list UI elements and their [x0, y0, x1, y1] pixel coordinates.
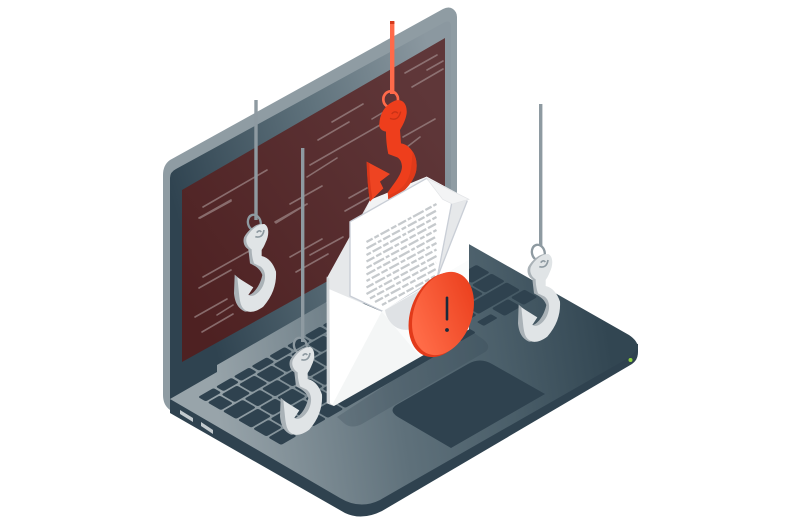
envelope inner grey flap — [437, 201, 467, 277]
letter paper — [350, 178, 469, 312]
pocket left panel — [327, 288, 382, 405]
keyboard — [198, 249, 537, 445]
red hook shading — [388, 152, 417, 199]
envelope with paper — [327, 178, 469, 406]
keyboard number row — [208, 306, 389, 410]
envelope back flap — [327, 177, 469, 303]
alert badge — [397, 263, 485, 366]
base top deck — [170, 222, 638, 505]
keyboard row three — [223, 265, 490, 419]
laptop base — [170, 222, 638, 517]
badge face — [401, 263, 485, 364]
red fishing line — [390, 22, 394, 94]
hook body — [280, 336, 322, 435]
envelope back flap highlight — [363, 177, 469, 217]
lid inner panel — [170, 22, 451, 400]
badge rim — [397, 264, 483, 366]
port: usb left — [180, 410, 193, 422]
red ring — [383, 91, 398, 107]
laptop screen lid — [163, 8, 457, 410]
paper corner fold — [427, 178, 469, 204]
envelope back and red hook — [327, 177, 469, 303]
envelope front pocket — [327, 260, 469, 406]
port: usb right — [201, 422, 213, 434]
status led — [628, 358, 632, 362]
red hook eye — [390, 112, 401, 119]
screen text lines — [195, 55, 443, 332]
lid bezel — [163, 8, 457, 410]
grey hook: lower middle — [280, 148, 322, 435]
hook body — [234, 213, 276, 312]
envelope shadow from alert — [385, 290, 420, 330]
fishing line — [301, 148, 304, 342]
fishing line — [539, 104, 542, 246]
red line cap — [390, 21, 394, 24]
letter text rows — [366, 204, 436, 305]
pocket right white area — [382, 260, 469, 357]
envelope shadow on deck — [337, 330, 488, 426]
inner flap edge — [437, 201, 467, 277]
grey hook: upper left — [234, 100, 276, 312]
red hook barb — [367, 162, 390, 202]
trackpad — [392, 360, 545, 448]
screen panel — [182, 38, 445, 362]
keyboard row four — [238, 274, 505, 428]
exclamation mark — [445, 296, 449, 332]
keyboard function row — [198, 306, 363, 402]
envelope right inner side — [430, 199, 469, 303]
keyboard bottom row — [268, 290, 537, 445]
red phishing hook — [367, 21, 417, 202]
base underside edge — [170, 300, 638, 517]
keyboard row five — [253, 282, 520, 436]
hook body — [518, 243, 560, 342]
grey hook: right — [518, 104, 560, 342]
red hook body — [379, 100, 417, 199]
pocket edge — [327, 277, 334, 406]
fishing line — [254, 100, 258, 220]
